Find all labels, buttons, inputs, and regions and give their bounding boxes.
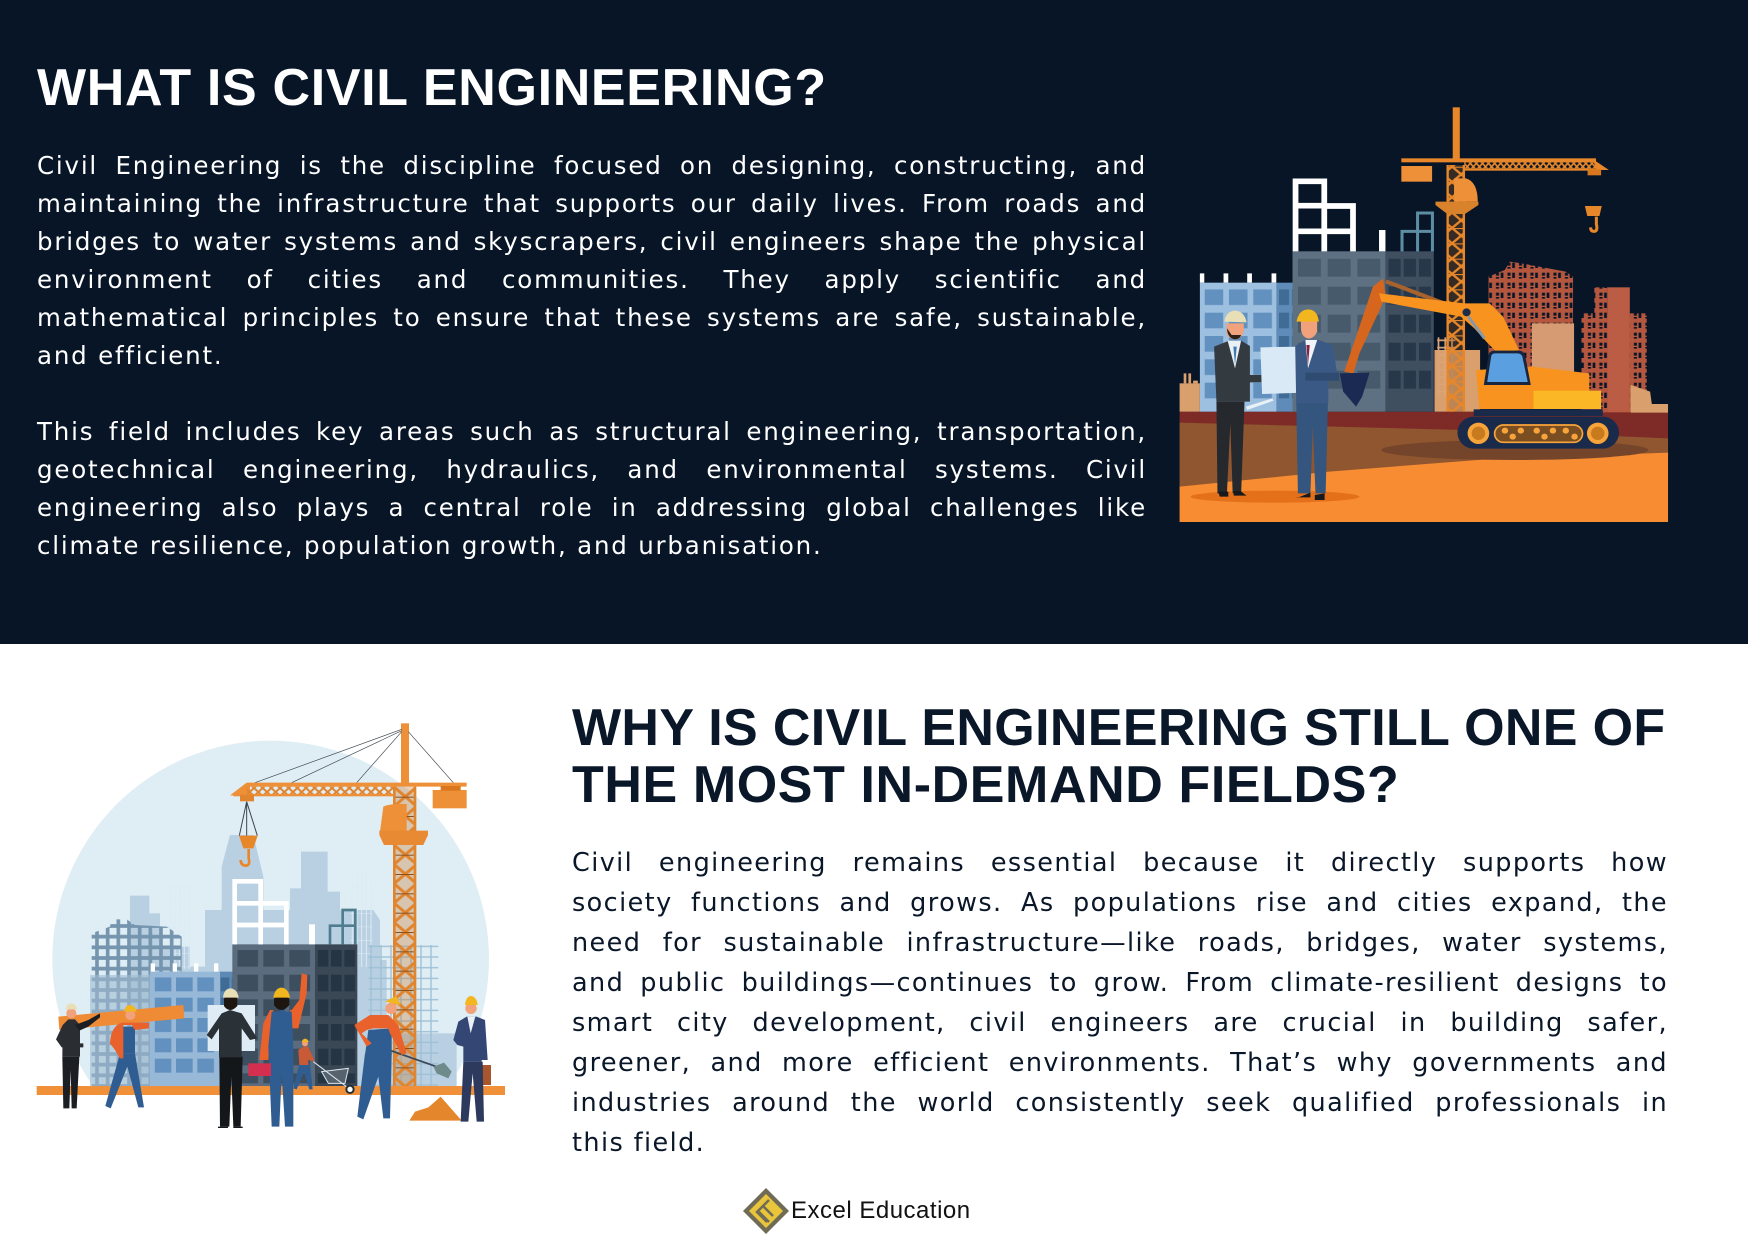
text block: definition paragraph — [37, 151, 1147, 370]
worker with wheelbarrow — [293, 1039, 354, 1093]
icon: logo diamond — [743, 1188, 789, 1234]
engineer in dark suit — [1214, 311, 1274, 497]
ground layers — [1180, 412, 1668, 522]
crane hook — [1585, 206, 1602, 231]
text block: why civil engineering remains essential: and public buildings—continues to grow. From climate-resilient designs to — [572, 968, 1668, 998]
text block: definition paragraph: bridges to water systems and skyscrapers, civil engineers shape the physical — [37, 227, 1147, 256]
manager with clipboard — [56, 1003, 184, 1108]
grey building with frames — [232, 881, 357, 1086]
illustration: construction crew with crane — [36, 723, 505, 1128]
ground strip — [37, 1086, 505, 1095]
footer logo: Excel Education — [743, 1188, 971, 1234]
worker with shovel — [354, 996, 452, 1119]
text block: key areas paragraph: engineering also plays a central role in addressing global challenges like — [37, 493, 1147, 522]
tower crane — [230, 723, 467, 1086]
blue building — [150, 963, 254, 1086]
grey building with frames — [1292, 181, 1434, 412]
text block: key areas paragraph: This field includes key areas such as structural engineering, transportation, — [37, 417, 1147, 446]
text block: definition paragraph: Civil Engineering is the discipline focused on designing, constructing, and — [37, 151, 1147, 180]
heading: what is civil engineering: WHAT IS CIVIL ENGINEERING? — [37, 59, 827, 117]
heading: why civil engineering is in demand: WHY IS CIVIL ENGINEERING STILL ONE OF — [572, 699, 1666, 757]
sand pile — [409, 1097, 462, 1121]
blueprint — [1260, 347, 1305, 394]
engineer seen from behind with plans — [207, 988, 257, 1128]
blue building under construction — [1180, 273, 1317, 412]
text block: why civil engineering remains essential: smart city development, civil engineers are crucial in building safer, — [572, 1008, 1668, 1038]
excavator — [1340, 278, 1619, 449]
illustration: engineers and excavator at construction site — [1180, 107, 1668, 522]
text block: definition paragraph: and efficient. — [37, 341, 223, 370]
tower crane — [1401, 107, 1609, 412]
engineer in blue suit — [1295, 309, 1339, 500]
worker carrying beam — [105, 1005, 149, 1108]
text block: key areas paragraph: climate resilience, population growth, and urbanisation. — [37, 531, 823, 560]
text block: why civil engineering remains essential: this field. — [572, 1128, 705, 1158]
text block: definition paragraph: environment of cities and communities. They apply scientific and — [37, 265, 1147, 294]
panel: why civil engineering is in demand — [0, 644, 1748, 1240]
text block: definition paragraph: maintaining the infrastructure that supports our daily lives. From roads and — [37, 189, 1147, 218]
text block: why civil engineering remains essential: greener, and more efficient environments. That’s why governments and — [572, 1048, 1668, 1078]
text block: why civil engineering remains essential: society functions and grows. As populations rise and cities expand, the — [572, 888, 1668, 918]
background circle and skyline — [52, 740, 489, 1086]
manager with briefcase — [453, 996, 491, 1122]
heading: why civil engineering is in demand — [572, 699, 1666, 814]
text block: definition paragraph: mathematical principles to ensure that these systems are safe, sustainable, — [37, 303, 1147, 332]
panel: what is civil engineering — [0, 0, 1748, 644]
worker pointing upward — [248, 973, 307, 1127]
steel frame building — [90, 919, 438, 1086]
logo wordmark: Excel Education — [791, 1197, 971, 1224]
text block: why civil engineering remains essential: need for sustainable infrastructure—like roads, bridges, water systems, — [572, 928, 1668, 958]
text block: why civil engineering remains essential: Civil engineering remains essential because it directly supports how — [572, 848, 1668, 878]
red buildings under construction — [1489, 262, 1668, 413]
text block: key areas paragraph — [36, 417, 1147, 560]
heading: why civil engineering is in demand: THE MOST IN-DEMAND FIELDS? — [572, 756, 1399, 814]
text block: key areas paragraph: geotechnical engineering, hydraulics, and environmental systems. Civil — [37, 455, 1147, 484]
crane hook — [239, 802, 258, 866]
text block: why civil engineering remains essential: industries around the world consistently seek qualified professionals in — [572, 1088, 1668, 1118]
